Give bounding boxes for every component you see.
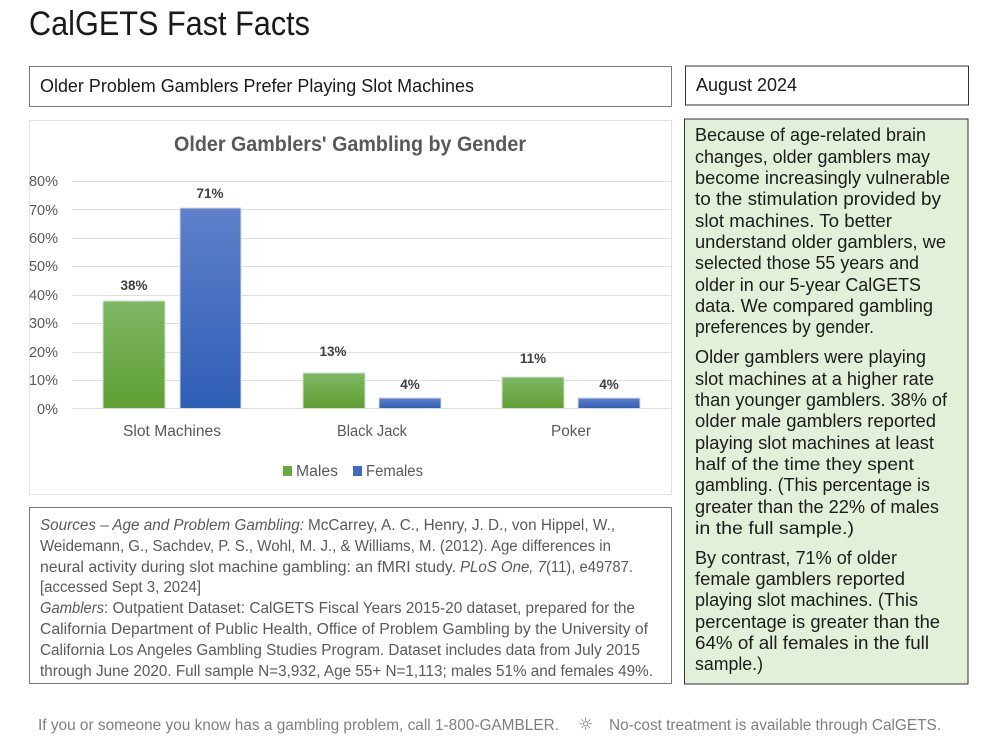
panel: explanation: female gamblers reported (695, 569, 905, 589)
legend: Females (366, 463, 423, 480)
y axis labels: 70% (29, 203, 58, 219)
panel: explanation: percentage is greater than the (695, 612, 940, 632)
panel: explanation: older male gamblers reported (695, 411, 936, 431)
chart title: Older Gamblers' Gambling by Gender (174, 132, 527, 156)
category labels (123, 423, 591, 440)
panel: explanation: than younger gamblers. 38% of (695, 390, 948, 410)
panel: sources: Gamblers (40, 600, 104, 617)
panel: explanation (684, 119, 968, 684)
y axis labels: 40% (29, 288, 58, 304)
y axis labels: 0% (37, 402, 58, 418)
category labels: Black Jack (337, 423, 407, 440)
panel: explanation: to the stimulation provided by (695, 189, 941, 209)
panel: explanation: older in our 5-year CalGETS (695, 275, 921, 295)
title: CalGETS Fast Facts (29, 5, 310, 43)
panel: sources: California Department of Public Health, Office of Problem Gambling by the University of (40, 621, 649, 638)
category labels: Poker (551, 423, 591, 440)
y axis labels: 60% (29, 231, 58, 247)
panel: explanation: greater than the 22% of males (695, 497, 939, 517)
panel: sources: McCarrey, A. C., Henry, J. D., von Hippel, W., (308, 517, 615, 534)
panel: sources (30, 508, 672, 684)
panel: sources: [accessed Sept 3, 2024] (40, 579, 201, 596)
panel: sources: neural activity during slot machine gambling: an fMRI study. (40, 559, 456, 576)
panel: sources: : Outpatient Dataset: CalGETS Fiscal Years 2015-20 dataset, prepared for the (104, 600, 635, 617)
data labels: 71% (196, 186, 224, 201)
legend: Males (296, 463, 338, 480)
panel: explanation: in the full sample.) (695, 518, 854, 538)
panel: explanation: preferences by gender. (695, 317, 874, 337)
y axis labels: 10% (29, 373, 58, 389)
footer: If you or someone you know has a gambling problem, call 1-800-GAMBLER. (38, 717, 559, 734)
panel: explanation: data. We compared gambling (695, 296, 933, 316)
bars: males (103, 301, 564, 408)
panel: explanation: selected those 55 years and (695, 253, 919, 273)
y axis labels: 80% (29, 174, 58, 190)
data labels (120, 186, 619, 392)
panel: sources: Weidemann, G., Sachdev, P. S., Wohl, M. J., & Williams, M. (2012). Age differences in (40, 538, 611, 555)
panel: explanation: Because of age-related brain (695, 125, 926, 145)
panel: sources: through June 2020. Full sample N=3,932, Age 55+ N=1,113; males 51% and females 49%. (40, 663, 653, 680)
panel: explanation: half of the time they spent (695, 454, 914, 474)
panel: explanation: playing slot machines at least (695, 433, 934, 453)
y axis labels: 30% (29, 316, 58, 332)
data labels: 4% (599, 377, 619, 392)
panel: sources: (11), e49787. (546, 559, 633, 576)
panel: sources: California Los Angeles Gambling Studies Program. Dataset includes data from July 2015 (40, 642, 640, 659)
subtitle box: Older Problem Gamblers Prefer Playing Slot Machines (40, 75, 474, 96)
panel: sources: Sources – Age and Problem Gambling: (40, 517, 304, 534)
data labels: 13% (319, 344, 347, 359)
panel: explanation: changes, older gamblers may (695, 147, 930, 167)
panel: chart (29, 120, 672, 494)
y axis labels (29, 174, 58, 418)
panel: explanation: understand older gamblers, we (695, 232, 946, 252)
data labels: 4% (400, 377, 420, 392)
legend (283, 463, 423, 480)
panel: explanation: playing slot machines. (This (695, 590, 918, 610)
subtitle box (30, 66, 672, 106)
panel: explanation: By contrast, 71% of older (695, 548, 897, 568)
icon: sun: ☼ (578, 715, 593, 735)
panel: explanation: slot machines at a higher rate (695, 369, 934, 389)
panel: explanation: sample.) (695, 654, 763, 674)
date box: August 2024 (696, 74, 797, 95)
panel: explanation: gambling. (This percentage is (695, 475, 930, 495)
panel: explanation: become increasingly vulnerable (695, 168, 950, 188)
data labels: 11% (520, 351, 546, 366)
panel: sources: PLoS One, 7 (460, 559, 547, 576)
panel: explanation: 64% of all females in the full (695, 633, 929, 653)
panel: explanation: Older gamblers were playing (695, 347, 926, 367)
footer: No-cost treatment is available through CalGETS. (609, 717, 941, 734)
panel: explanation: slot machines. To better (695, 211, 892, 231)
y axis labels: 50% (29, 259, 58, 275)
y axis labels: 20% (29, 345, 58, 361)
footer (38, 715, 941, 735)
category labels: Slot Machines (123, 423, 221, 440)
data labels: 38% (120, 278, 148, 293)
date box (686, 66, 968, 105)
bars: females (180, 208, 640, 408)
